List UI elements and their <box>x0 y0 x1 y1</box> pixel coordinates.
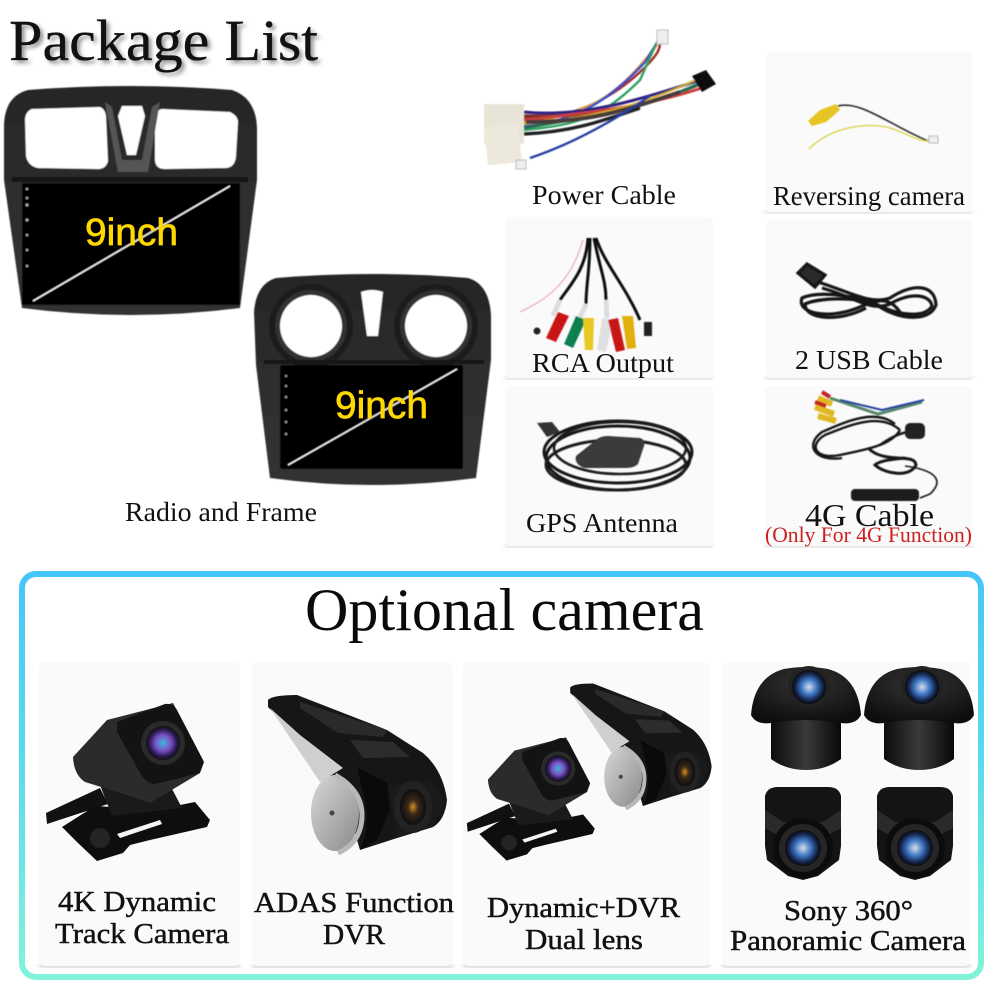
4G cable illustration <box>813 392 937 501</box>
label: Reversing camera <box>773 181 965 211</box>
title: Package List: Package List <box>12 11 321 76</box>
card: GPS antenna <box>505 386 713 547</box>
card: RCA output <box>505 217 713 379</box>
label: 4G Cable: 4G Cable <box>805 497 934 533</box>
panel heading: Optional camera <box>305 577 704 643</box>
9inch label, radio 2: 9inch <box>335 385 428 427</box>
label: RCA Output <box>532 348 675 378</box>
label <box>730 896 967 957</box>
camera card: 4K dynamic track camera <box>39 662 240 967</box>
DVR image small <box>570 684 712 808</box>
cable illustration <box>484 30 716 169</box>
camera card: ADAS function DVR <box>252 662 454 967</box>
title: Package List: Package List <box>9 8 318 73</box>
camera card: Sony 360 panoramic <box>722 662 974 967</box>
note: only for 4G function: (Only For 4G Function) <box>765 522 972 547</box>
card: 2 USB cable <box>765 220 972 379</box>
label: GPS Antenna <box>526 508 678 538</box>
box camera left <box>765 787 841 880</box>
label: Track Camera <box>55 919 230 950</box>
item: power cable <box>484 30 716 210</box>
card: 4G cable <box>765 386 972 547</box>
9inch label, radio 1: 9inch <box>85 212 178 254</box>
label <box>254 888 454 951</box>
label <box>487 893 680 956</box>
label: DVR <box>323 920 385 951</box>
dome camera left <box>751 666 861 770</box>
rear camera image small <box>467 737 595 861</box>
DVR image <box>268 695 447 853</box>
caption: Radio and Frame: Radio and Frame <box>125 497 317 527</box>
label: ADAS Function <box>254 888 454 919</box>
reversing cable illustration <box>808 104 938 149</box>
label: 2 USB Cable <box>795 345 943 375</box>
label: Dynamic+DVR <box>487 893 680 924</box>
radio 1 with frame <box>4 86 257 315</box>
dome camera right <box>864 666 974 770</box>
RCA cable illustration <box>520 238 652 352</box>
camera card: dynamic + DVR dual lens <box>463 662 712 967</box>
label <box>55 887 230 950</box>
label: Panoramic Camera <box>730 926 967 957</box>
box camera right <box>877 787 953 880</box>
USB cable illustration <box>798 264 936 317</box>
label: Sony 360° <box>784 896 913 927</box>
label: Dual lens <box>525 925 643 956</box>
GPS antenna illustration <box>537 421 692 490</box>
panel: optional camera <box>22 574 981 977</box>
radio 2 with frame <box>254 274 491 485</box>
rear camera image <box>46 703 210 861</box>
label: Power Cable <box>532 180 676 210</box>
label: 4K Dynamic <box>58 887 216 918</box>
card: reversing camera <box>765 52 972 213</box>
